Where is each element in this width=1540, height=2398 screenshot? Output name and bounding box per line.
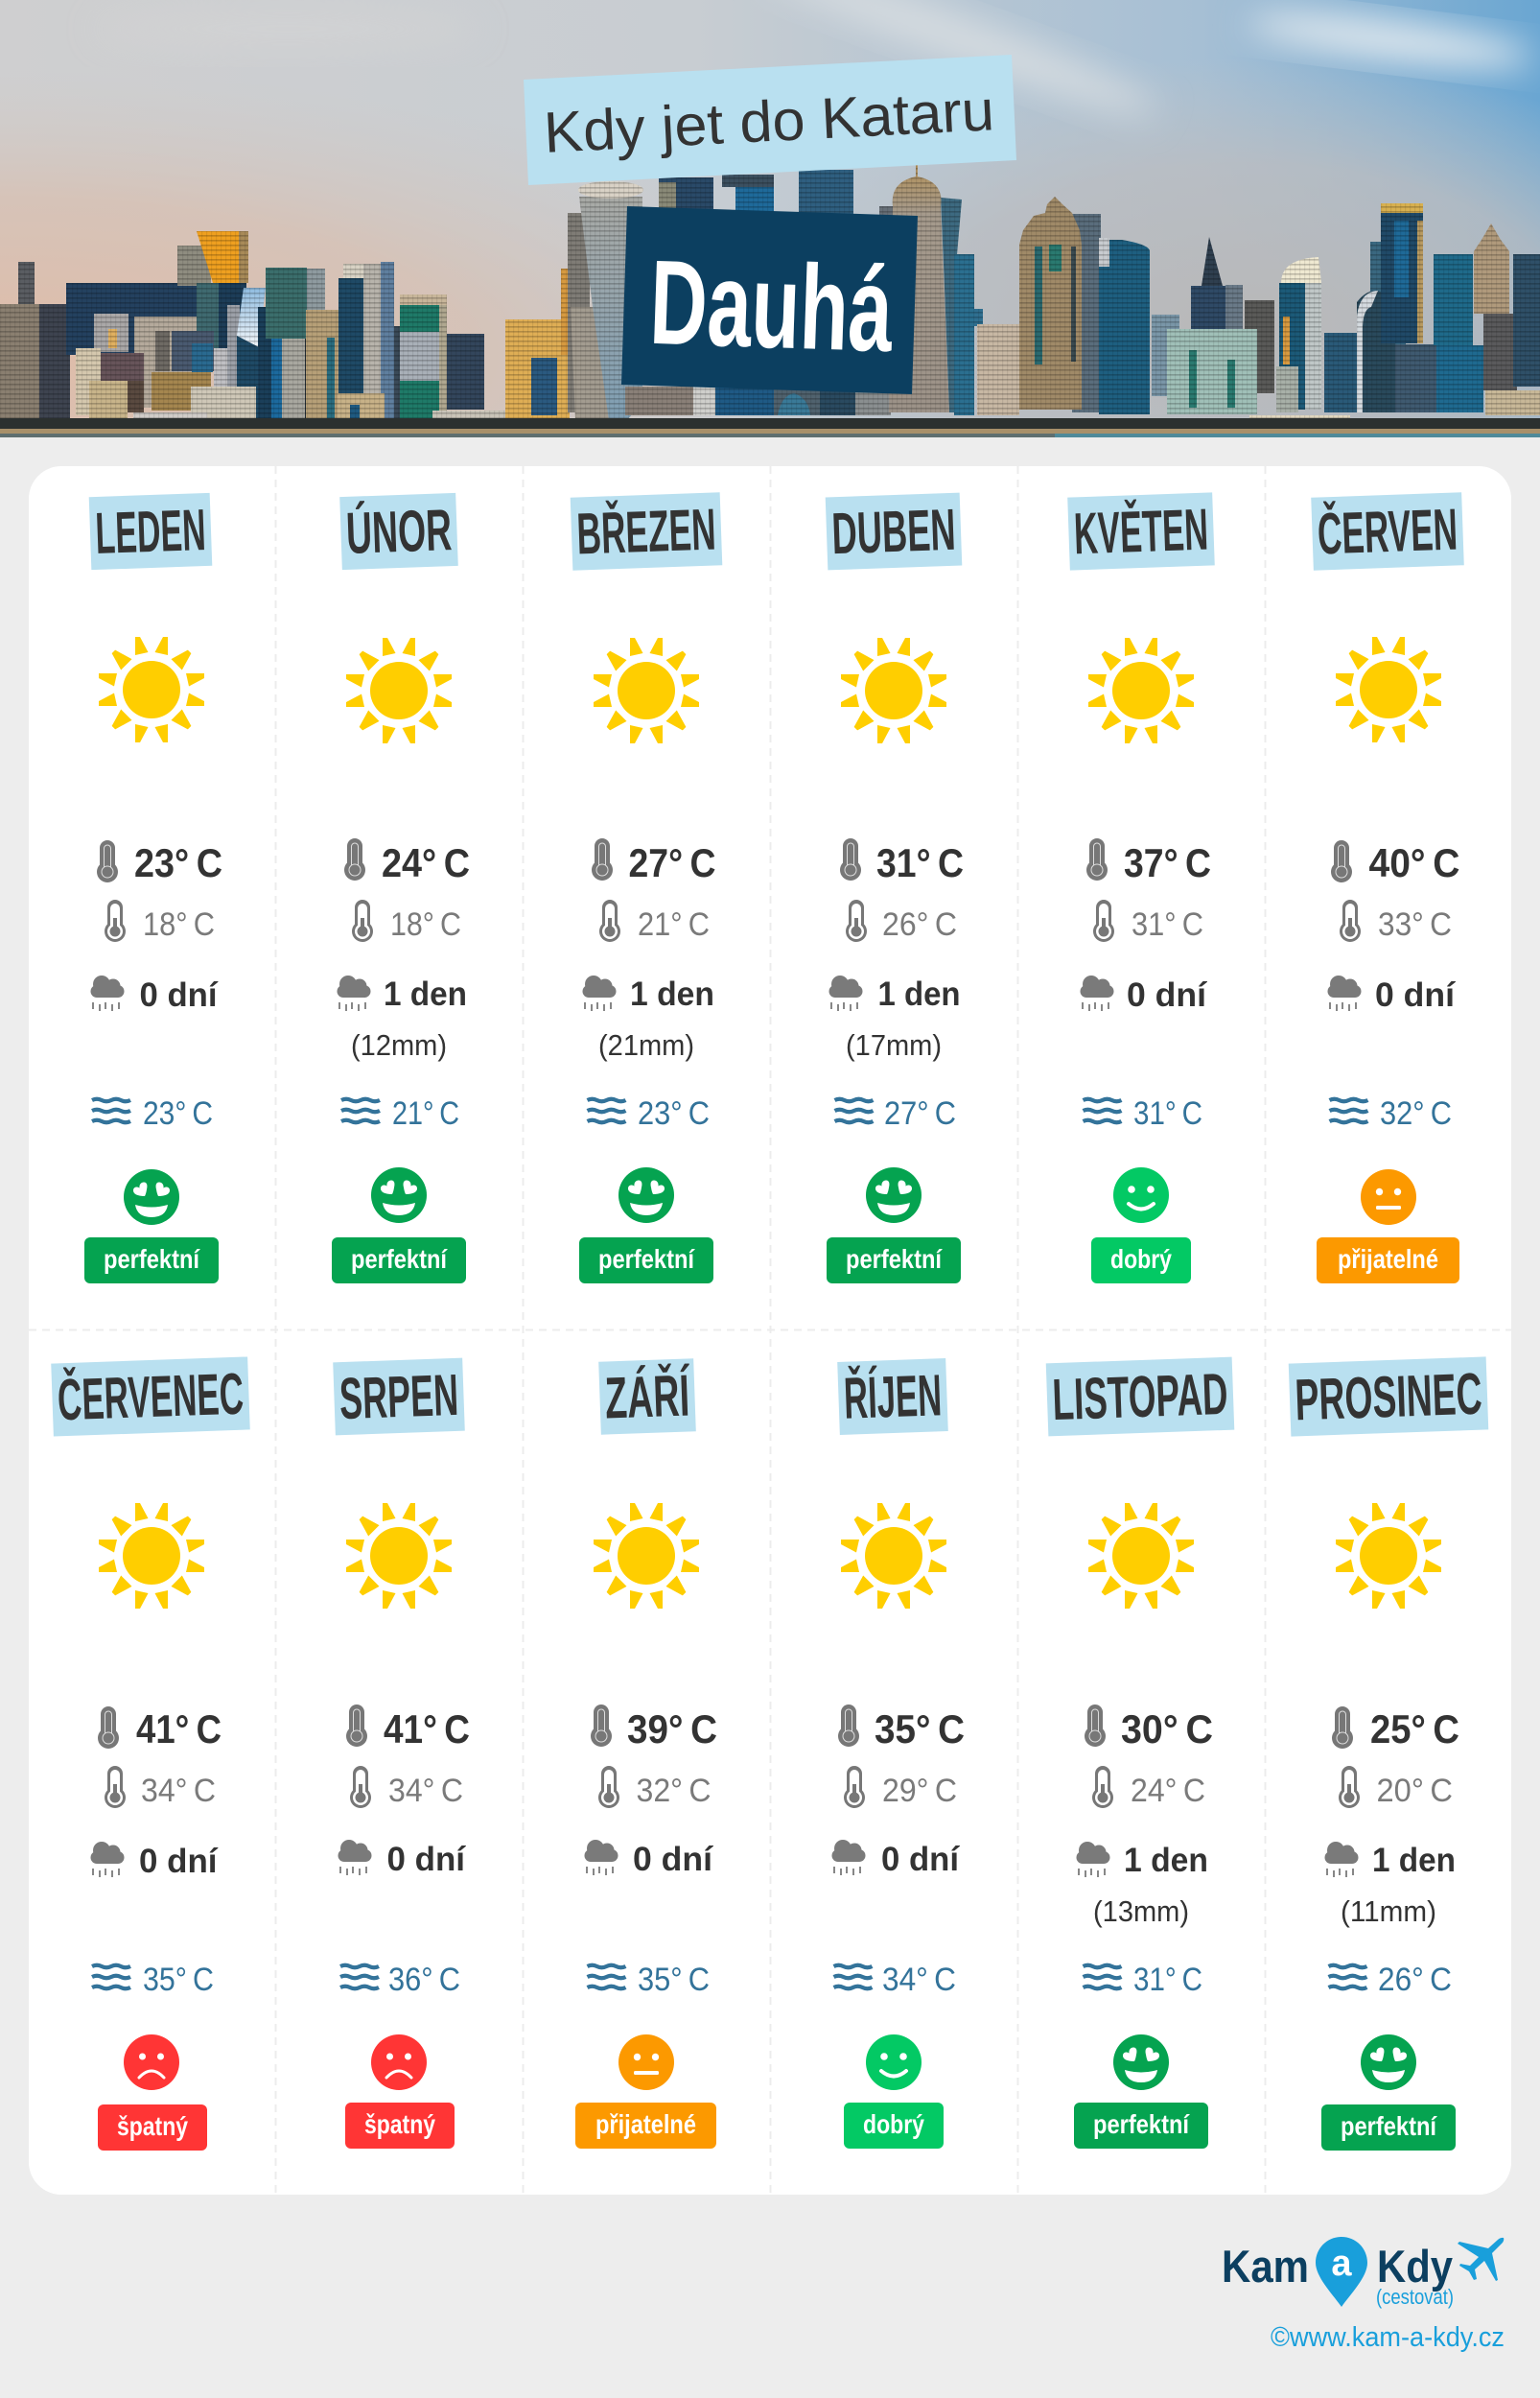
- rating badge: [1091, 1237, 1191, 1283]
- icon: rain cloud: [90, 976, 125, 1011]
- icon: waves: [92, 1099, 130, 1122]
- rating badge: [1074, 2103, 1208, 2149]
- month: srpen: [333, 1358, 470, 2149]
- icon: thermometer low: [1340, 900, 1361, 942]
- icon: sun: [1336, 1503, 1441, 1609]
- icon: face good: [866, 2034, 922, 2090]
- title tag: Dauhá: Dauhá: [648, 236, 895, 377]
- rating badge: dobrý: [1110, 1244, 1172, 1274]
- heading: ZÁŘÍ: [598, 1358, 696, 1435]
- icon: sun: [1336, 637, 1441, 742]
- icon: rain cloud: [1076, 1842, 1110, 1877]
- sea temperature: 34° C: [882, 1962, 956, 1998]
- rain days: 1 den: [878, 976, 961, 1013]
- low temperature: 24° C: [1131, 1773, 1205, 1809]
- low temperature: 31° C: [1132, 906, 1203, 943]
- icon: face bad: [371, 2034, 427, 2090]
- heading: SRPEN: [333, 1358, 465, 1435]
- icon: rain cloud: [338, 1840, 372, 1875]
- icon: thermometer low: [598, 1766, 619, 1808]
- icon: rain cloud: [338, 976, 370, 1011]
- sea temperature: 21° C: [392, 1095, 459, 1132]
- heading: LISTOPAD: LISTOPAD: [1051, 1361, 1229, 1432]
- month: březen: [571, 492, 722, 1283]
- low temperature: 18° C: [143, 906, 215, 943]
- high temperature: 24° C: [382, 840, 470, 885]
- month: říjen: [832, 1358, 965, 2149]
- title tag: Kdy jet do Kataru: [524, 55, 1016, 185]
- rainfall: (11mm): [1341, 1894, 1436, 1928]
- icon: sun: [1088, 1503, 1194, 1609]
- heading: KVĚTEN: KVĚTEN: [1073, 497, 1209, 566]
- icon: waves: [1084, 1965, 1122, 1988]
- low temperature: 32° C: [637, 1773, 712, 1809]
- panel: monthly climate table: [29, 466, 1511, 2195]
- icon: sun: [1088, 638, 1194, 743]
- heading: SRPEN: SRPEN: [338, 1362, 459, 1431]
- low temperature: 33° C: [1378, 906, 1452, 943]
- icon: waves: [1084, 1099, 1122, 1122]
- rain days: 0 dní: [1375, 976, 1456, 1014]
- rating badge: [579, 1237, 713, 1283]
- icon: waves: [834, 1099, 873, 1122]
- rating badge: perfektní: [351, 1244, 448, 1274]
- icon: sun: [99, 1503, 204, 1609]
- month: listopad: [1046, 1357, 1234, 2149]
- heading: LEDEN: LEDEN: [94, 497, 207, 566]
- icon: thermometer low: [1339, 1766, 1360, 1808]
- icon: thermometer low: [1093, 900, 1114, 942]
- icon: thermometer high: [97, 840, 118, 882]
- icon: thermometer high: [344, 838, 365, 881]
- low temperature: 29° C: [882, 1773, 957, 1809]
- low temperature: 34° C: [141, 1773, 216, 1809]
- heading: BŘEZEN: BŘEZEN: [575, 496, 717, 567]
- icon: waves: [587, 1965, 625, 1988]
- icon: face perfect: [371, 1167, 427, 1223]
- title tag: Kdy jet do Kataru: Kdy jet do Kataru: [543, 78, 995, 165]
- icon: sun: [594, 638, 699, 743]
- rating badge: špatný: [364, 2109, 435, 2139]
- rating badge: přijatelné: [1338, 1244, 1438, 1274]
- heading: DUBEN: DUBEN: [830, 497, 957, 566]
- heading: ZÁŘÍ: ZÁŘÍ: [604, 1362, 691, 1431]
- high temperature: 25° C: [1370, 1706, 1459, 1751]
- icon: thermometer high: [1331, 840, 1352, 882]
- rating badge: [98, 2104, 207, 2151]
- high temperature: 31° C: [876, 840, 964, 885]
- rain days: 1 den: [384, 976, 467, 1013]
- rating badge: perfektní: [598, 1244, 695, 1274]
- rating badge: [345, 2103, 455, 2149]
- sea temperature: 26° C: [1378, 1962, 1452, 1998]
- rating badge: přijatelné: [595, 2109, 696, 2139]
- month: červenec: [51, 1356, 250, 2151]
- rating badge: dobrý: [863, 2109, 924, 2139]
- rain days: 0 dní: [387, 1841, 466, 1878]
- icon: face perfect: [618, 1167, 674, 1223]
- rating badge: [332, 1237, 466, 1283]
- rating badge: [1321, 2104, 1456, 2151]
- title tag: Dauhá: [621, 206, 918, 394]
- icon: face perfect: [866, 1167, 922, 1223]
- high temperature: 37° C: [1124, 840, 1211, 885]
- icon: face perfect: [1113, 2034, 1169, 2090]
- rating badge: perfektní: [1341, 2111, 1437, 2141]
- icon: sun: [841, 638, 946, 743]
- month: prosinec: [1289, 1356, 1488, 2151]
- icon: thermometer low: [105, 1766, 126, 1808]
- sea temperature: 27° C: [884, 1095, 956, 1132]
- high temperature: 40° C: [1369, 840, 1459, 885]
- icon: thermometer high: [591, 1704, 612, 1747]
- icon: waves: [1329, 1965, 1367, 1988]
- heading: ČERVEN: [1311, 492, 1464, 571]
- icon: thermometer low: [599, 900, 620, 942]
- low temperature: 26° C: [882, 906, 957, 943]
- logo: Kam a Kdy: Kam: [1222, 2241, 1309, 2292]
- icon: thermometer high: [592, 838, 613, 881]
- sea temperature: 35° C: [638, 1962, 710, 1998]
- sea temperature: 36° C: [388, 1962, 460, 1998]
- sea temperature: 35° C: [143, 1962, 214, 1998]
- high temperature: 41° C: [384, 1706, 470, 1751]
- low temperature: 21° C: [638, 906, 710, 943]
- month: květen: [1067, 492, 1215, 1283]
- month: leden: [84, 493, 222, 1283]
- icon: rain cloud: [828, 976, 863, 1011]
- rating badge: [827, 1237, 961, 1283]
- icon: waves: [834, 1965, 873, 1988]
- sea temperature: 31° C: [1133, 1962, 1202, 1998]
- logo: Kam a Kdy: Kdy: [1377, 2241, 1453, 2292]
- high temperature: 30° C: [1121, 1706, 1213, 1751]
- heading: ČERVENEC: ČERVENEC: [57, 1361, 245, 1432]
- icon: thermometer low: [844, 1766, 865, 1808]
- rainfall: (13mm): [1093, 1894, 1189, 1928]
- icon: airplane: [1458, 2238, 1504, 2281]
- icon: face good: [1113, 1167, 1169, 1223]
- icon: rain cloud: [1080, 976, 1114, 1011]
- low temperature: 18° C: [390, 906, 461, 943]
- high temperature: 35° C: [875, 1706, 965, 1751]
- heading: BŘEZEN: [571, 492, 722, 571]
- heading: ÚNOR: [339, 493, 458, 570]
- icon: thermometer high: [840, 838, 861, 881]
- low temperature: 20° C: [1377, 1773, 1453, 1809]
- icon: waves: [340, 1965, 379, 1988]
- icon: thermometer low: [1092, 1766, 1113, 1808]
- month: září: [575, 1358, 717, 2149]
- rain days: 0 dní: [881, 1841, 960, 1878]
- icon: sun: [99, 637, 204, 742]
- icon: rain cloud: [585, 1840, 618, 1875]
- rating badge: [844, 2103, 944, 2149]
- icon: face perfect: [124, 1169, 179, 1225]
- rainfall: (21mm): [598, 1028, 694, 1062]
- rain days: 1 den: [630, 976, 714, 1013]
- sea temperature: 23° C: [638, 1095, 710, 1132]
- rain days: 0 dní: [140, 976, 219, 1014]
- sea temperature: 31° C: [1133, 1095, 1202, 1132]
- high temperature: 41° C: [136, 1706, 222, 1751]
- icon: thermometer high: [1085, 1704, 1106, 1747]
- logo: Kam a Kdy: [1222, 2237, 1504, 2309]
- icon: face acceptable: [1361, 1169, 1416, 1225]
- rain days: 0 dní: [139, 1843, 219, 1880]
- rain days: 0 dní: [1127, 976, 1207, 1014]
- heading: ŘÍJEN: [837, 1358, 948, 1435]
- rating badge: špatný: [117, 2111, 188, 2141]
- month: duben: [826, 493, 964, 1283]
- rainfall: (17mm): [846, 1028, 942, 1062]
- high temperature: 39° C: [627, 1706, 717, 1751]
- month: únor: [332, 493, 470, 1283]
- icon: rain cloud: [1327, 976, 1362, 1011]
- rating badge: perfektní: [104, 1244, 200, 1274]
- rainfall: (12mm): [351, 1028, 447, 1062]
- high temperature: 27° C: [629, 840, 715, 885]
- month: červen: [1311, 492, 1464, 1283]
- rating badge: [84, 1237, 219, 1283]
- header: Doha skyline photo: [0, 0, 1540, 437]
- rating badge: perfektní: [846, 1244, 943, 1274]
- icon: thermometer low: [105, 900, 126, 942]
- icon: rain cloud: [90, 1842, 125, 1877]
- icon: face perfect: [1361, 2034, 1416, 2090]
- heading: LISTOPAD: [1046, 1357, 1234, 1436]
- icon: rain cloud: [832, 1840, 865, 1875]
- low temperature: 34° C: [388, 1773, 463, 1809]
- icon: sun: [346, 1503, 452, 1609]
- icon: sun: [841, 1503, 946, 1609]
- rain days: 0 dní: [633, 1841, 713, 1878]
- heading: LEDEN: [89, 493, 212, 570]
- icon: sun: [346, 638, 452, 743]
- high temperature: 23° C: [134, 840, 222, 885]
- heading: DUBEN: [826, 493, 962, 570]
- website url: ©www.kam-a-kdy.cz: [1271, 2322, 1505, 2353]
- icon: waves: [587, 1099, 625, 1122]
- icon: thermometer high: [1332, 1706, 1353, 1749]
- icon: thermometer low: [350, 1766, 371, 1808]
- icon: map pin: a: [1331, 2244, 1352, 2284]
- logo: Kam a Kdy: (cestovat): [1376, 2285, 1454, 2309]
- icon: thermometer low: [352, 900, 373, 942]
- icon: sun: [594, 1503, 699, 1609]
- icon: waves: [92, 1965, 130, 1988]
- heading: KVĚTEN: [1067, 492, 1215, 571]
- rain days: 1 den: [1124, 1842, 1208, 1879]
- heading: ÚNOR: ÚNOR: [345, 497, 453, 566]
- heading: ŘÍJEN: ŘÍJEN: [843, 1362, 943, 1431]
- icon: rain cloud: [1325, 1842, 1358, 1877]
- icon: waves: [1329, 1099, 1367, 1122]
- icon: rain cloud: [583, 976, 616, 1011]
- icon: thermometer high: [346, 1704, 367, 1747]
- rating badge: [1317, 1237, 1459, 1283]
- icon: thermometer high: [98, 1706, 119, 1749]
- heading: ČERVENEC: [51, 1356, 250, 1437]
- icon: thermometer low: [846, 900, 867, 942]
- icon: thermometer high: [1086, 838, 1108, 881]
- sea temperature: 23° C: [143, 1095, 213, 1132]
- rain days: 1 den: [1372, 1842, 1456, 1879]
- icon: map pin: [1316, 2237, 1367, 2307]
- icon: face bad: [124, 2034, 179, 2090]
- rating badge: perfektní: [1093, 2109, 1190, 2139]
- rating badge: [575, 2103, 716, 2149]
- sea temperature: 32° C: [1380, 1095, 1452, 1132]
- icon: thermometer high: [838, 1704, 859, 1747]
- icon: face acceptable: [618, 2034, 674, 2090]
- icon: waves: [341, 1099, 380, 1122]
